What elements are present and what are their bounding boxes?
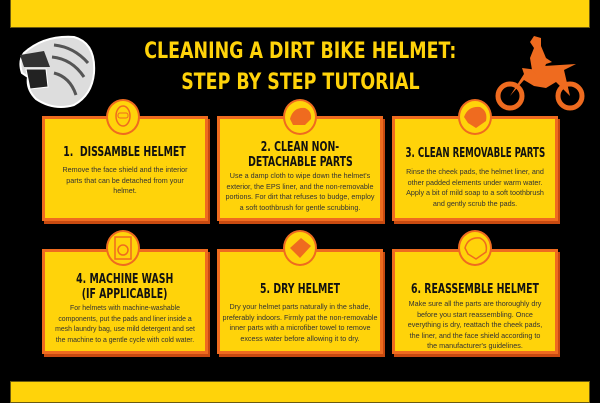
icon circle 5 — [283, 230, 317, 266]
card 3 — [392, 116, 558, 221]
card 6: 6. REASSEMBLE HELMET — [411, 282, 539, 297]
card 4: (IF APPLICABLE) — [82, 287, 168, 302]
icon: helmet illustration — [19, 36, 96, 108]
card 2: Use a damp cloth to wipe down the helmet's exterior, the EPS liner, and the non-removable portions. For dirt that refuses to budge, employ a soft toothbrush for gentle scrubbing. — [225, 171, 375, 212]
card 6 — [392, 249, 558, 354]
card 6: Make sure all the parts are thoroughly dry before you start reassembling. Once everything is dry, reattach the cheek pads, the liner, and the face shield according to the manufacturer's guidelines. — [408, 299, 542, 350]
card 1 — [42, 116, 208, 221]
card 4: 4. MACHINE WASH — [76, 272, 174, 287]
title: CLEANING A DIRT BIKE HELMET: — [144, 39, 456, 64]
card 3: Rinse the cheek pads, the helmet liner, and other padded elements under warm water. Apply a bit of mild soap to a soft toothbrush and gently scrub the pads. — [406, 167, 544, 208]
card 1: 1. DISSAMBLE HELMET — [64, 145, 186, 160]
card 3: 3. CLEAN REMOVABLE PARTS — [405, 146, 545, 161]
card 2: 2. CLEAN NON- — [261, 140, 339, 155]
card 5: 5. DRY HELMET — [260, 282, 340, 297]
title: STEP BY STEP TUTORIAL — [181, 70, 419, 95]
icon circle 1 — [106, 99, 140, 135]
card 2: DETACHABLE PARTS — [248, 155, 352, 170]
icon circle 2 — [283, 99, 317, 135]
icon circle 4 — [106, 230, 140, 266]
card 4 — [42, 249, 208, 354]
card 5 — [217, 249, 383, 354]
icon circle 3 — [458, 99, 492, 135]
title — [144, 39, 456, 95]
top banner — [10, 0, 590, 28]
icon circle 6 — [458, 230, 492, 266]
card 1: Remove the face shield and the interior parts that can be detached from your helmet. — [62, 165, 188, 195]
bottom banner — [10, 381, 590, 403]
card 4: For helmets with machine-washable components, put the pads and liner inside a mesh laundry bag, use mild detergent and set the machine to a gentle cycle with cold water. — [55, 305, 195, 344]
icon: motocross rider — [496, 36, 584, 110]
card 5: Dry your helmet parts naturally in the shade, preferably indoors. Firmly pat the non-removable inner parts with a microfiber towel to remove excess water before allowing it to dry. — [222, 302, 378, 342]
card 2 — [217, 116, 383, 221]
